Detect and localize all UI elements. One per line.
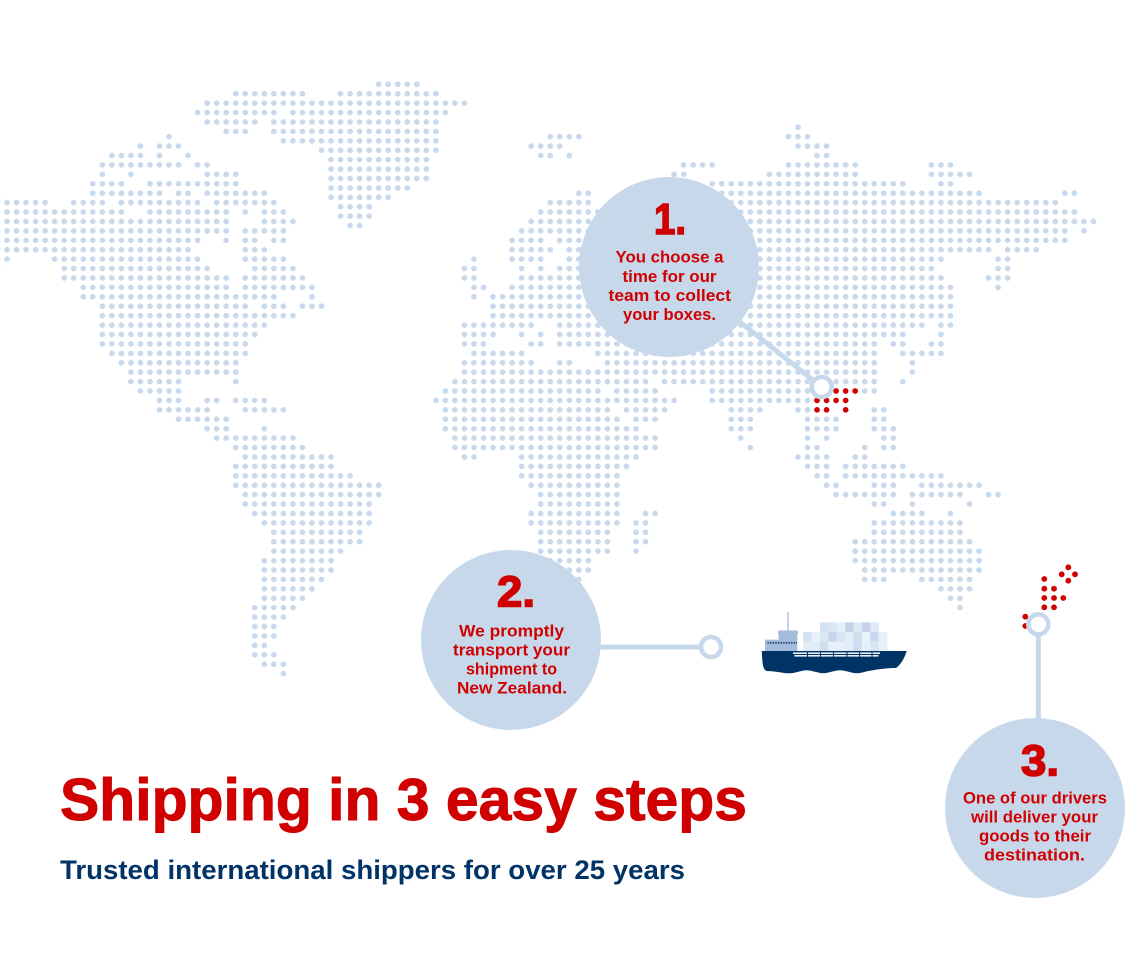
map: Greenland and arctic islands xyxy=(198,84,465,226)
map: red dots, origin region xyxy=(817,391,856,410)
step 2 text: shipment to xyxy=(466,660,557,678)
step 1 bubble xyxy=(579,177,759,357)
ship containers xyxy=(803,622,887,651)
step 2 text xyxy=(453,622,571,698)
step 2 bubble xyxy=(421,550,601,730)
map: red dots, New Zealand xyxy=(1022,564,1078,629)
dotted world map xyxy=(0,84,1094,674)
step 2 number: 2. xyxy=(497,568,535,616)
step 2 text: We promptly xyxy=(459,622,565,640)
step 3 text: goods to their xyxy=(979,828,1092,846)
step 1 text: time for our xyxy=(622,268,717,286)
step 3 text: destination. xyxy=(984,846,1085,864)
step 1 text: team to collect xyxy=(608,287,732,305)
step 1 text: You choose a xyxy=(616,249,724,267)
map: Americas, Eurasia, Africa and Oceania xyxy=(0,127,1094,674)
step 3 text: One of our drivers xyxy=(963,790,1107,808)
step 3 text: will deliver your xyxy=(970,808,1099,826)
connector: step 3 xyxy=(1028,614,1048,725)
step 3 text xyxy=(963,790,1107,864)
icon: container ship xyxy=(762,612,907,673)
step 3 number: 3. xyxy=(1021,736,1059,786)
step 1 number: 1. xyxy=(654,195,686,244)
step 1 text xyxy=(608,249,732,324)
ship windows xyxy=(768,642,797,644)
ship hull xyxy=(762,651,907,673)
step 1 text: your boxes. xyxy=(623,306,716,324)
ship deck rails xyxy=(793,652,880,657)
step 2 text: New Zealand. xyxy=(457,680,567,698)
step 3 bubble xyxy=(945,718,1125,898)
connector: step 2 xyxy=(595,637,721,657)
ship superstructure xyxy=(765,612,798,651)
title: Shipping in 3 easy steps xyxy=(60,767,747,833)
step 2 text: transport your xyxy=(453,642,571,660)
connector: step 1 xyxy=(735,318,832,397)
subtitle: Trusted international shippers for over 25 years xyxy=(60,855,685,885)
